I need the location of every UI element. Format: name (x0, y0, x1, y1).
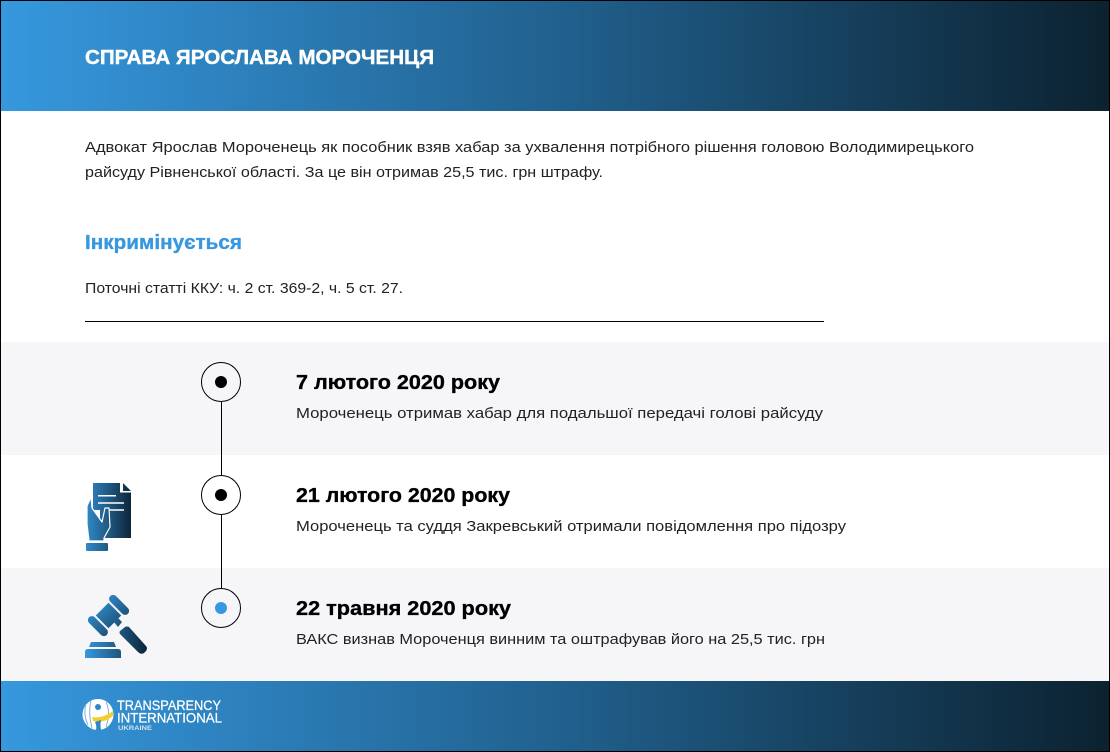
event 2 (296, 485, 847, 535)
footer band (1, 681, 1109, 751)
heading: incriminated: Інкримінується (85, 232, 242, 254)
event 2: 21 лютого 2020 року (296, 485, 511, 507)
logo: Transparency International Ukraine: UKRAINE (118, 725, 153, 732)
event 1 (296, 372, 824, 422)
event 3: 22 травня 2020 року (296, 598, 512, 620)
logo: Transparency International Ukraine: INTERNATIONAL (117, 710, 222, 726)
icon: gavel (85, 593, 147, 658)
timeline connector (221, 402, 222, 588)
event 1: 7 лютого 2020 року (296, 372, 501, 394)
timeline marker 2 (202, 476, 240, 514)
header band (1, 1, 1109, 111)
current articles text: Поточні статті ККУ: ч. 2 ст. 369-2, ч. 5 ст. 27. (85, 280, 403, 297)
event 3 (296, 598, 825, 648)
event 2: Мороченець та суддя Закревський отримали повідомлення про підозру (296, 518, 847, 535)
logo: Transparency International Ukraine (82, 698, 222, 732)
title: СПРАВА ЯРОСЛАВА МОРОЧЕНЦЯ (85, 47, 434, 69)
icon: hand holding document (86, 483, 131, 551)
timeline marker 3 (202, 588, 240, 628)
intro paragraph: райсуду Рівненської області. За це він отримав 25,5 тис. грн штрафу. (85, 164, 603, 181)
intro paragraph: Адвокат Ярослав Мороченець як пособник взяв хабар за ухвалення потрібного рішення головою Володимирецького (85, 139, 974, 156)
timeline row 1 background (1, 342, 1109, 455)
event 3: ВАКС визнав Мороченця винним та оштрафував його на 25,5 тис. грн (296, 631, 825, 648)
timeline row 3 background (1, 568, 1109, 681)
timeline marker 1 (202, 362, 240, 402)
logo: Transparency International Ukraine: TRANSPARENCY (117, 698, 221, 713)
event 1: Мороченець отримав хабар для подальшої передачі голові райсуду (296, 405, 824, 422)
intro paragraph (85, 139, 974, 181)
